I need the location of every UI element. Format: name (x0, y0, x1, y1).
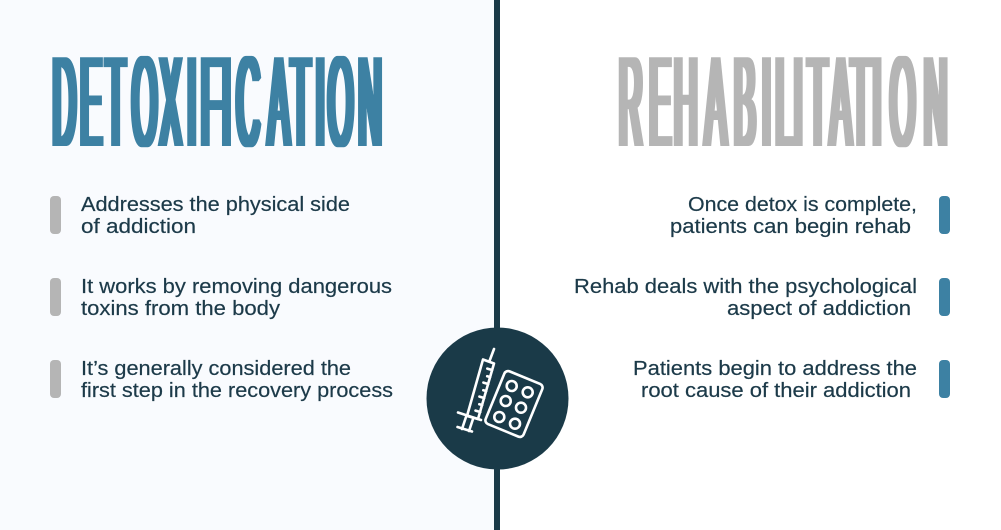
list: detoxification points (50, 194, 393, 402)
center divider line (494, 0, 500, 530)
text: removing toxins: toxins from the body (81, 298, 280, 320)
text: physical side (81, 194, 350, 238)
text: psychological aspect: aspect of addiction (727, 298, 911, 320)
text: root cause (633, 358, 917, 402)
bullet marker 3 (50, 360, 61, 398)
bullet marker 2 (50, 278, 61, 316)
icon: blister pill pack (484, 370, 544, 438)
bullet marker 2 (939, 278, 950, 316)
text: first step: first step in the recovery process (81, 380, 393, 402)
text: root cause: root cause of their addiction (641, 380, 911, 402)
text: removing toxins (81, 276, 392, 320)
heading: rehabilitation: REHABILITATION (619, 29, 947, 173)
text: first step (81, 358, 393, 402)
text: once detox is complete (670, 194, 917, 238)
icon: syringe (458, 349, 494, 432)
text: root cause: Patients begin to address the (633, 358, 917, 380)
text: removing toxins: It works by removing dangerous (81, 276, 392, 298)
text: psychological aspect (574, 276, 917, 320)
list: rehabilitation points (574, 194, 950, 402)
text: physical side: of addiction (81, 216, 196, 238)
bullet marker 1 (939, 196, 950, 234)
text: physical side: Addresses the physical side (81, 194, 350, 216)
text: psychological aspect: Rehab deals with the psychological (574, 276, 917, 298)
center badge (426, 328, 568, 470)
bullet marker 1 (50, 196, 61, 234)
text: first step: It’s generally considered the (81, 358, 351, 380)
text: once detox is complete: Once detox is complete, (688, 194, 917, 216)
text: once detox is complete: patients can begin rehab (670, 216, 911, 238)
bullet marker 3 (939, 360, 950, 398)
heading: detoxification: DETOXIFICATION (53, 29, 382, 173)
panel: detoxification background (0, 0, 495, 530)
